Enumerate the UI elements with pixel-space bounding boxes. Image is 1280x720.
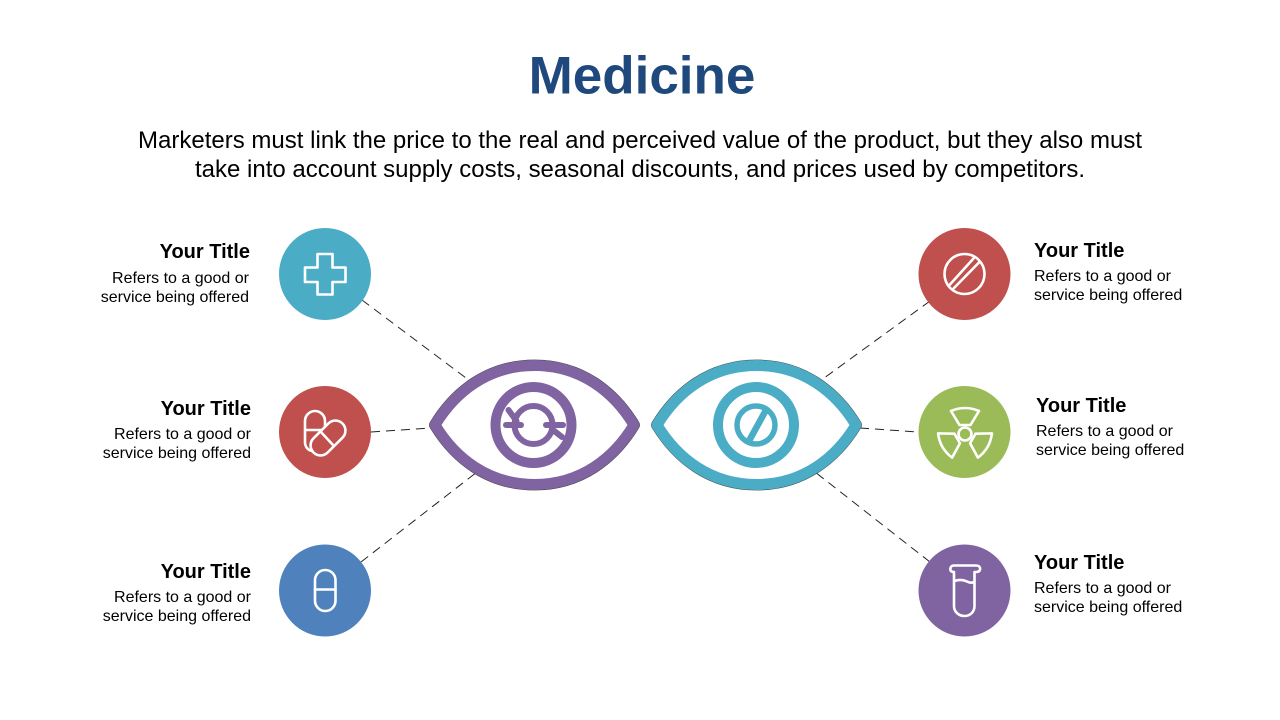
subtitle text: Marketers must link the price to the real and perceived value of the product, but they also must (138, 127, 1142, 154)
item: middle right: Refers to a good or (1036, 423, 1174, 440)
item: top right: Refers to a good or (1034, 268, 1172, 285)
item: bottom left: Your Title (161, 561, 251, 583)
item: middle left: service being offered (103, 445, 251, 462)
item: bottom right (918, 544, 1182, 636)
item: middle right (918, 386, 1184, 478)
item: bottom left: Refers to a good or (114, 589, 252, 606)
item: bottom right: service being offered (1034, 599, 1182, 616)
left eye (435, 366, 634, 484)
icon: radiation (935, 408, 995, 459)
item: middle left (103, 386, 371, 478)
item: bottom left (103, 544, 371, 636)
item: top left (101, 228, 371, 320)
item: top left: Refers to a good or (112, 270, 250, 287)
icon: two capsules (305, 411, 350, 460)
subtitle text: take into account supply costs, seasonal discounts, and prices used by competitors. (195, 156, 1085, 183)
item: middle right: Your Title (1036, 395, 1126, 417)
item: bottom right: Your Title (1034, 552, 1124, 574)
item: middle right: service being offered (1036, 442, 1184, 459)
item: bottom right: Refers to a good or (1034, 580, 1172, 597)
dashed connectors (361, 300, 930, 562)
item: top right: Your Title (1034, 240, 1124, 262)
item: middle left: Refers to a good or (114, 426, 252, 443)
item: bottom left: service being offered (103, 608, 251, 625)
subtitle text (138, 127, 1142, 183)
icon: test tube (950, 566, 980, 616)
icon: tablet (944, 254, 984, 294)
item: top left: service being offered (101, 289, 249, 306)
title: Medicine (529, 46, 755, 106)
right eye (657, 366, 856, 484)
item: top right (918, 228, 1182, 320)
icon: capsule (315, 570, 336, 611)
item: top right: service being offered (1034, 287, 1182, 304)
item: middle left: Your Title (161, 398, 251, 420)
icon: medical cross (305, 254, 346, 294)
item: top left: Your Title (160, 241, 250, 263)
